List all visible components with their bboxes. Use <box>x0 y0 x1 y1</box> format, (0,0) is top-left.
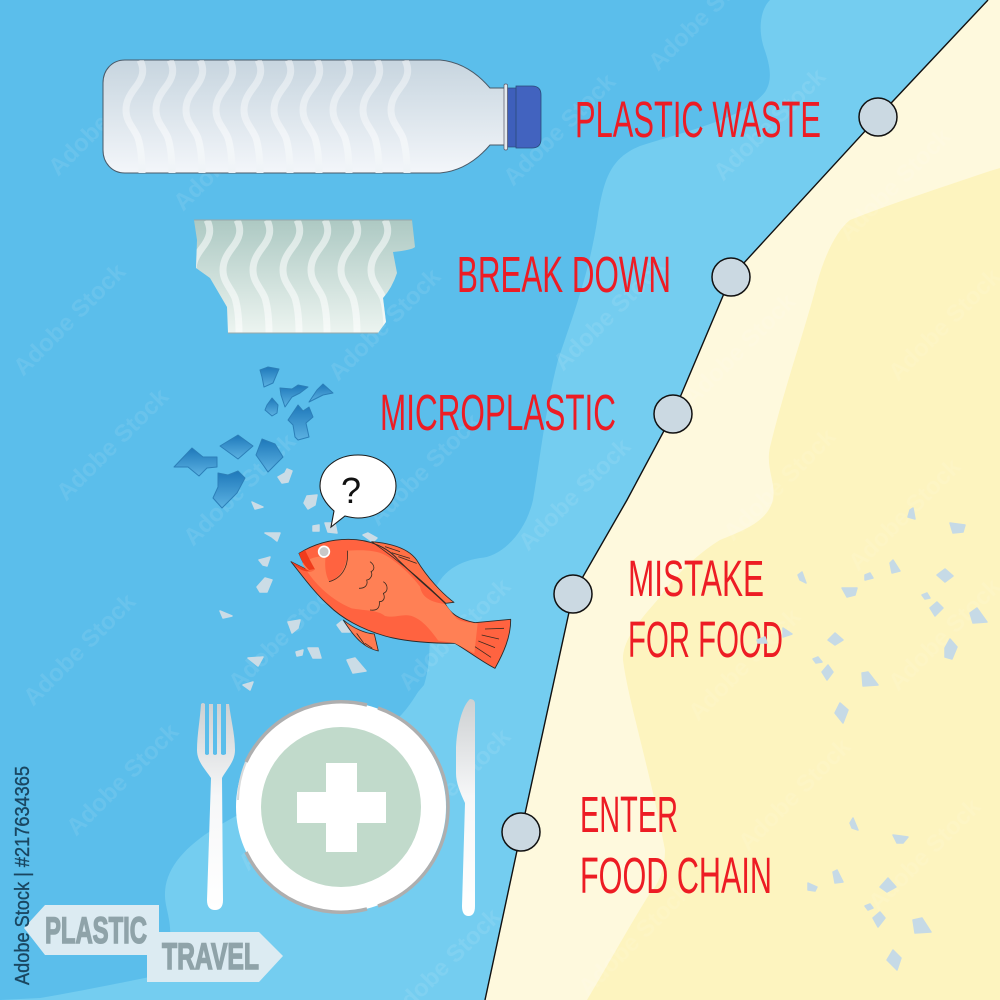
watermarks: Adobe Stock <box>18 588 142 711</box>
arrow: travel <box>147 932 283 982</box>
watermarks: Adobe Stock <box>43 58 167 181</box>
icon: fork <box>197 703 235 910</box>
fish body <box>291 539 511 668</box>
watermarks: Adobe Stock <box>708 63 832 186</box>
stock credit: Adobe Stock | #217634365 <box>12 766 34 985</box>
watermarks: Adobe Stock <box>323 263 447 386</box>
watermarks: Adobe Stock <box>393 573 517 696</box>
watermarks: Adobe Stock <box>733 733 857 856</box>
watermarks: Adobe Stock <box>363 408 487 531</box>
icon: knife <box>456 699 475 916</box>
label: enter: ENTER <box>580 786 678 843</box>
icon: fish <box>291 539 511 668</box>
watermarks: Adobe Stock <box>573 878 697 1000</box>
icon: plastic bottle <box>103 60 541 173</box>
watermarks: Adobe Stock <box>678 288 802 411</box>
labels <box>380 91 821 904</box>
label: break down: BREAK DOWN <box>457 246 671 303</box>
watermarks: Adobe Stock <box>863 793 987 916</box>
shoreline <box>485 0 988 1000</box>
speech bubble <box>320 455 396 527</box>
watermarks: Adobe Stock <box>223 573 347 696</box>
fish lower fin <box>343 620 378 651</box>
logo: plastic travel arrows <box>24 905 283 982</box>
watermarks: Adobe Stock <box>498 68 622 191</box>
watermarks: Adobe Stock <box>393 723 517 846</box>
watermarks: Adobe Stock <box>718 423 842 546</box>
watermarks: Adobe Stock <box>548 253 672 376</box>
label: mistake: MISTAKE <box>628 550 764 607</box>
label: for food: FOR FOOD <box>628 611 783 668</box>
plate cross <box>297 763 386 852</box>
icon: blue plastic fragments <box>174 367 333 508</box>
label: plastic waste: PLASTIC WASTE <box>575 91 821 148</box>
logo text: travel: TRAVEL <box>162 936 259 977</box>
icon: plastic on sand <box>757 508 987 970</box>
fish dorsal fin <box>372 542 454 603</box>
arrow: plastic <box>24 905 159 955</box>
fish light flank <box>302 550 478 653</box>
timeline markers <box>502 98 897 851</box>
label: food chain: FOOD CHAIN <box>580 847 772 904</box>
beach: deeper sand <box>587 168 1000 1000</box>
watermarks: Adobe Stock <box>8 258 132 381</box>
watermarks: Adobe Stock <box>51 383 175 506</box>
watermarks: Adobe Stock <box>178 428 302 551</box>
icon: broken plastic piece <box>193 220 415 333</box>
fish mouth <box>291 550 315 571</box>
logo text: plastic: PLASTIC <box>45 910 147 951</box>
watermarks: Adobe Stock <box>61 718 185 841</box>
watermarks: Adobe Stock <box>513 433 637 556</box>
watermarks: Adobe Stock <box>833 123 957 246</box>
icon: microplastic particles <box>220 469 377 690</box>
beach <box>485 0 1000 1000</box>
watermarks: Adobe Stock <box>683 603 807 726</box>
icon: plate with cross <box>236 702 448 912</box>
label: microplastic: MICROPLASTIC <box>380 384 616 441</box>
watermarks: Adobe Stock <box>233 753 357 876</box>
watermarks: Adobe Stock <box>168 93 292 216</box>
watermarks: Adobe Stock <box>843 453 967 576</box>
fish fin details <box>329 542 504 657</box>
fish eye <box>319 546 329 557</box>
speech bubble: ? <box>341 470 361 511</box>
